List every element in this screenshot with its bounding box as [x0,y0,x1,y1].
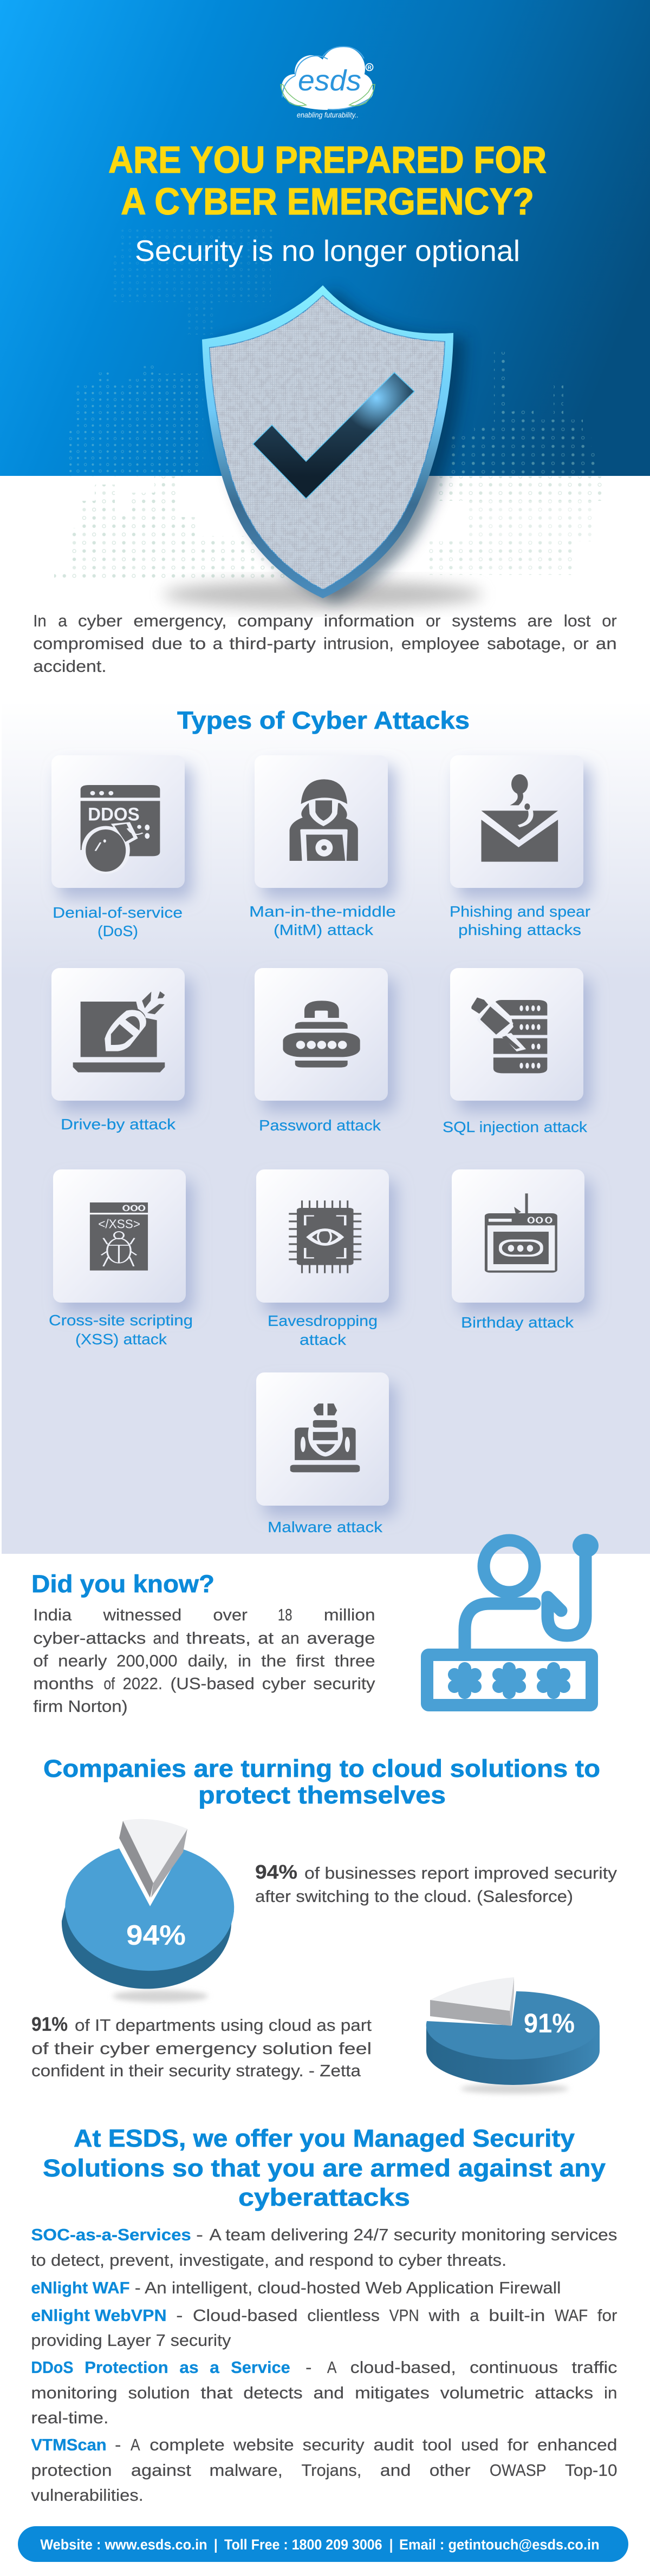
service: VTMScan: tool [422,2435,452,2454]
text: did you know body: and [153,1629,179,1647]
service: eNlight WebVPN: providing Layer 7 security [31,2331,231,2350]
service: VTMScan: audit [374,2435,414,2454]
service: DDoS protection [31,2358,618,2427]
heading: did you know: Did you know? [31,1570,214,1598]
value label: 91% [524,2008,575,2038]
icon: XSS bug window: </XSS> [98,1217,140,1231]
text: did you know body: security [314,1674,375,1693]
text: 91 percent stat: confident in their security strategy. - Zetta [31,2061,361,2080]
service: DDoS protection: and [314,2383,344,2402]
text: did you know body: threats, [186,1629,251,1647]
text: did you know body: at [258,1629,274,1647]
intro paragraph: a [58,611,68,630]
chart: 94% pie [62,1819,234,2002]
service: eNlight WebVPN: - [176,2306,183,2325]
value label: 94% [126,1920,186,1951]
service: VTMScan: other [430,2461,471,2480]
service: VTMScan: OWASP [490,2461,547,2480]
heading: managed security: Solutions so that you are armed against any [43,2154,606,2182]
card: password [255,968,388,1134]
intro paragraph: employee [401,634,479,653]
intro paragraph: or [602,611,617,630]
service: eNlight WebVPN: for [597,2306,618,2325]
text: did you know body: cyber [262,1674,306,1693]
text: did you know body: three [335,1651,375,1670]
service: VTMScan: VTMScan [31,2435,107,2454]
label [249,903,396,938]
service: DDoS protection: DDoS [31,2358,73,2377]
service: eNlight WebVPN: eNlight WebVPN [31,2306,167,2325]
service: SOC: - [196,2225,203,2244]
text: did you know body: (US-based [171,1674,255,1693]
text: did you know body: nearly [58,1651,107,1670]
heading: companies [43,1755,600,1809]
icon: password lock [283,1001,360,1068]
text: did you know body: 2022. [123,1674,162,1693]
text: did you know body: an [281,1629,300,1647]
service: VTMScan: A [131,2435,140,2454]
footer contact bar: Website : www.esds.co.in [40,2536,207,2553]
label: (XSS) attack [75,1331,167,1348]
text: did you know body [33,1605,375,1716]
text: did you know body: daily, [188,1651,228,1670]
icon: chip with eye [289,1200,361,1273]
label: Phishing and spear [450,903,590,920]
text: did you know body: months [33,1674,94,1693]
icon: DDoS bomb: DDOS [88,804,140,825]
service: VTMScan: Trojans, [301,2461,361,2480]
service: eNlight WebVPN: Cloud-based [193,2306,297,2325]
service: DDoS protection: a [210,2358,220,2377]
card: eavesdropping [256,1169,389,1348]
service: DDoS protection: volumetric [440,2383,524,2402]
service: eNlight WebVPN: with [428,2306,460,2325]
label: attack [300,1331,347,1348]
label: Drive-by attack [61,1116,176,1133]
text: did you know body: over [213,1605,248,1624]
text: did you know body: firm Norton) [33,1697,128,1716]
service: eNlight WebVPN: clientless [307,2306,380,2325]
title [108,139,547,223]
service: eNlight WAF: - An intelligent, cloud-hosted Web Application Firewall [135,2278,561,2297]
intro paragraph: or [573,634,589,653]
intro paragraph: emergency, [133,611,227,630]
text: 94 percent stat: 94% [255,1861,297,1883]
check mark [253,372,414,499]
card: denial of service [51,755,185,939]
service: VTMScan: protection [31,2461,112,2480]
card: birthday [452,1169,584,1331]
icon: password window [485,1193,557,1273]
service: VTMScan: against [131,2461,191,2480]
text: did you know body: 200,000 [116,1651,178,1670]
heading: companies: Companies are turning to cloud solutions to [43,1755,600,1782]
footer contact bar: | [389,2536,393,2553]
footer contact bar: | [214,2536,218,2553]
intro paragraph: company [238,611,313,630]
label: (MitM) attack [274,921,374,938]
intro paragraph: information [324,611,414,630]
intro paragraph: to [190,634,206,653]
intro paragraph: intrusion, [323,634,394,653]
icon: XSS bug window [90,1202,148,1271]
text: 91 percent stat [31,2013,372,2080]
service: DDoS protection: in [604,2383,618,2402]
intro paragraph: or [426,611,441,630]
service: DDoS protection: real-time. [31,2408,109,2427]
label: SQL injection attack [443,1119,588,1135]
label: Man-in-the-middle [249,903,396,920]
text: did you know body: the [261,1651,287,1670]
footer contact bar: Toll Free : 1800 209 3006 [224,2536,382,2553]
text: services list [31,2225,618,2505]
icon: laptop with cursor [73,991,165,1073]
label [53,904,183,939]
subtitle: Security is no longer optional [135,234,520,267]
panel: hero banner [0,0,650,582]
service: eNlight WebVPN: WAF [555,2306,588,2325]
logo wordmark: esds [298,64,361,97]
service: eNlight WebVPN: VPN [389,2306,419,2325]
heading: types of cyber attacks: Types of Cyber Attacks [177,707,470,734]
text: did you know body: witnessed [102,1605,181,1624]
label [450,903,590,938]
text: did you know body: average [307,1629,375,1647]
text: did you know body: first [296,1651,325,1670]
text: did you know body: cyber-attacks [33,1629,146,1647]
intro paragraph: an [596,634,617,653]
service: DDoS protection: - [306,2358,312,2377]
label: Password attack [259,1117,381,1134]
service: DDoS protection: traffic [571,2358,618,2377]
text: did you know body: in [238,1651,251,1670]
label: phishing attacks [458,921,581,938]
text: 91 percent stat: of their cyber emergency solution feel [31,2039,372,2058]
icon: phishing password hook [427,1534,599,1705]
card: man in the middle [249,755,396,938]
service: eNlight WAF: eNlight WAF [31,2278,130,2297]
service: VTMScan: used [461,2435,499,2454]
logo registered mark: R [367,65,372,71]
card: cross-site scripting [49,1169,193,1348]
card: sql injection [443,968,588,1135]
intro paragraph: systems [452,611,517,630]
label [268,1312,378,1348]
service: DDoS protection: Service [231,2358,290,2377]
footer contact bar [18,2526,628,2562]
intro paragraph [33,611,617,676]
text: 94 percent stat: of businesses report improved security [304,1864,618,1882]
service: VTMScan: Top-10 [565,2461,618,2480]
heading: managed security [43,2124,606,2211]
service: VTMScan: security [303,2435,365,2454]
card: phishing [450,755,590,938]
label: (DoS) [98,923,138,939]
text: did you know body: India [33,1605,72,1624]
intro paragraph: sabotage, [487,634,566,653]
icon: malware bug on laptop [290,1403,360,1472]
title: ARE YOU PREPARED FOR [108,139,547,181]
intro paragraph: cyber [78,611,122,630]
intro paragraph: third-party [229,634,316,653]
intro paragraph: accident. [33,657,107,676]
text: did you know body: of [33,1651,48,1670]
service: SOC: to detect, prevent, investigate, and respond to cyber threats. [31,2251,506,2270]
intro paragraph: compromised [33,634,144,653]
label: Denial-of-service [53,904,183,921]
card: drive-by [51,968,185,1133]
service: DDoS protection: monitoring [31,2383,118,2402]
service: VTMScan: website [233,2435,294,2454]
service: eNlight WebVPN: built-in [489,2306,545,2325]
service: VTMScan: and [380,2461,411,2480]
label: Cross-site scripting [49,1312,193,1329]
service: DDoS protection: Protection [84,2358,168,2377]
logo tagline: enabling futurability.. [297,110,359,119]
panel: types of cyber attacks [2,701,650,1554]
service: DDoS protection: detects [243,2383,303,2402]
logo: esds [281,47,375,119]
icon: server with plug [471,997,547,1073]
service: SOC: SOC-as-a-Services [31,2225,191,2244]
service: SOC [31,2225,618,2270]
service: VTMScan [31,2435,618,2505]
text: 94 percent stat [255,1861,618,1906]
intro paragraph: are [527,611,552,630]
intro paragraph: In [33,611,47,630]
label: Birthday attack [461,1314,574,1331]
text: 94 percent stat: after switching to the cloud. (Salesforce) [255,1887,573,1906]
text: 91 percent stat: of IT departments using cloud as part [75,2016,372,2035]
text: did you know body: million [324,1605,375,1624]
heading: managed security: cyberattacks [238,2183,410,2211]
text: did you know body: of [103,1674,115,1693]
card: malware [256,1372,389,1535]
service: VTMScan: for [508,2435,529,2454]
service: SOC: A team delivering 24/7 security monitoring services [209,2225,618,2244]
heading: companies: protect themselves [198,1781,446,1809]
icon: phishing envelope [482,774,558,862]
intro paragraph: lost [564,611,591,630]
chart: 91% pie [426,1977,600,2094]
service: DDoS protection: that [200,2383,233,2402]
service: eNlight WAF [31,2278,561,2297]
label: Eavesdropping [268,1312,378,1329]
dot pattern: data skyline [54,226,607,582]
service: VTMScan: enhanced [537,2435,618,2454]
service: DDoS protection: cloud-based, [350,2358,456,2377]
icon: DDoS bomb [81,785,160,874]
icon: hooded hacker [290,779,358,861]
service: VTMScan: malware, [209,2461,283,2480]
service: DDoS protection: continuous [470,2358,558,2377]
text: did you know body: 18 [278,1605,292,1624]
title: A CYBER EMERGENCY? [121,180,534,223]
intro paragraph: a [213,634,223,653]
service: DDoS protection: as [179,2358,199,2377]
service: eNlight WebVPN [31,2306,618,2350]
service: DDoS protection: mitigates [355,2383,430,2402]
service: DDoS protection: attacks [535,2383,593,2402]
service: VTMScan: vulnerabilities. [31,2486,144,2505]
service: VTMScan: complete [150,2435,225,2454]
label: Malware attack [268,1519,383,1535]
logo registered mark [366,64,373,71]
service: DDoS protection: solution [128,2383,190,2402]
label [49,1312,193,1348]
service: DDoS protection: A [327,2358,337,2377]
service: VTMScan: - [115,2435,121,2454]
service: eNlight WebVPN: a [470,2306,479,2325]
heading: managed security: At ESDS, we offer you Managed Security [74,2124,575,2152]
footer contact bar: Email : getintouch@esds.co.in [399,2536,600,2553]
intro paragraph: due [152,634,183,653]
icon: shield with check mark [163,285,483,609]
text: 91 percent stat: 91% [31,2013,68,2035]
